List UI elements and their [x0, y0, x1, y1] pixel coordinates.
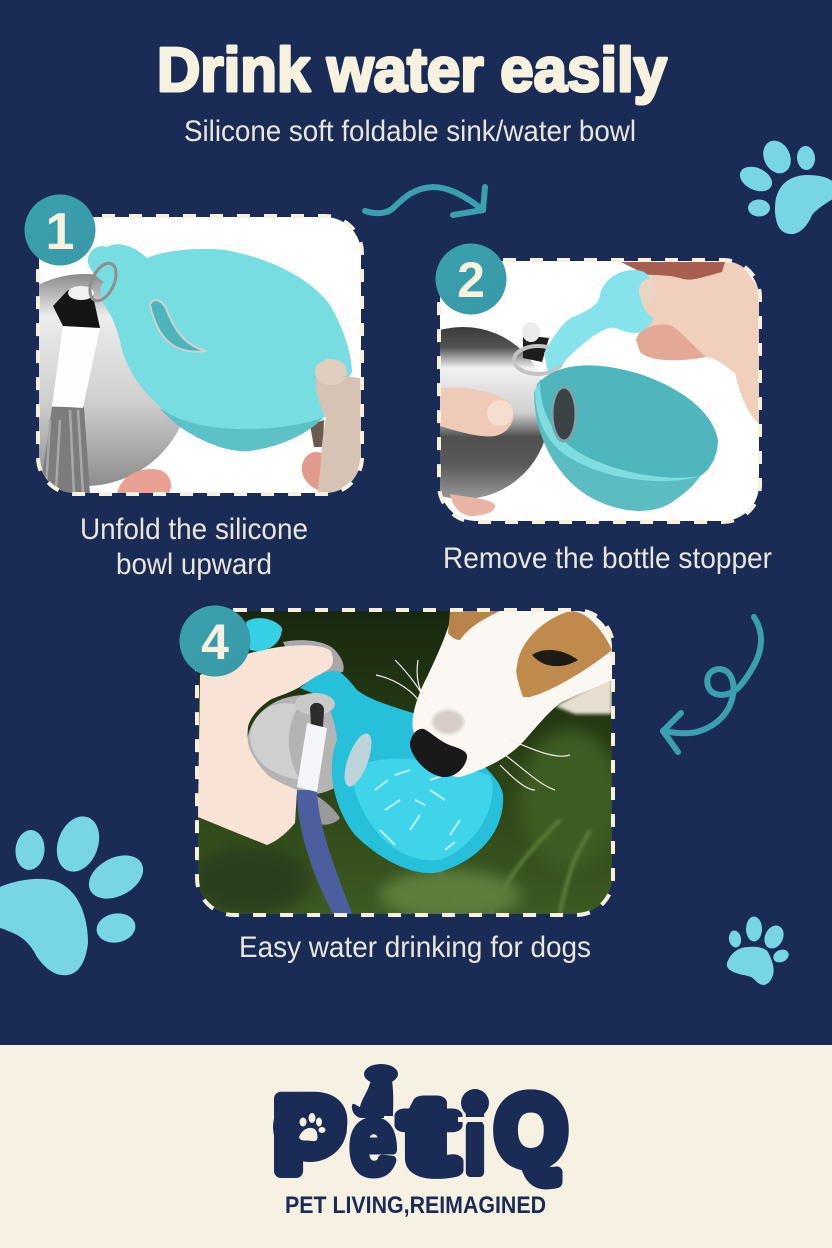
wordmark: i	[465, 1096, 485, 1191]
bottle neck through tab	[295, 693, 335, 715]
grass blades	[190, 730, 620, 920]
arrow: step 2 to step 4	[663, 617, 761, 752]
bowl knob	[246, 618, 282, 651]
fingers below	[117, 469, 171, 494]
bowl	[300, 671, 503, 873]
dashed border: step 4	[197, 610, 613, 915]
dog head	[412, 611, 612, 777]
icon: paw small right	[727, 916, 791, 985]
badge: step 1	[24, 194, 96, 266]
bowl tab	[544, 270, 654, 372]
whiskers	[376, 660, 570, 790]
footer band	[0, 1045, 832, 1248]
icon: paw in logo	[299, 1113, 326, 1141]
tagline: PET LIVING,REIMAGINED	[285, 1192, 546, 1219]
title: Drink water easily	[157, 36, 667, 105]
bottle top	[283, 640, 344, 676]
caption: step 1: Unfold the silicone	[80, 513, 308, 546]
right hand	[621, 262, 760, 425]
wordmark: P	[274, 1077, 344, 1194]
caption: step 2: Remove the bottle stopper	[443, 542, 772, 575]
dashed border: step 2	[439, 260, 760, 522]
bowl slot	[150, 300, 206, 352]
bowl interior	[537, 365, 718, 479]
steel bottle	[39, 274, 180, 486]
bowl outer	[534, 380, 704, 511]
badge: step 2: 2	[457, 252, 485, 308]
wordmark: Q	[495, 1075, 567, 1185]
bowl underside	[160, 408, 325, 451]
panel: step 2 photo	[440, 261, 759, 521]
wordmark	[274, 1075, 567, 1194]
logo	[273, 1064, 567, 1194]
icon: paw top right	[736, 136, 832, 234]
badge: step 2	[436, 244, 506, 314]
badge: step 1: 1	[46, 203, 74, 261]
leash	[297, 790, 352, 914]
strap	[43, 407, 90, 494]
i dot	[461, 1089, 489, 1117]
steel bottle	[440, 327, 544, 498]
dog nose	[410, 729, 467, 777]
steel bottle	[248, 695, 337, 794]
hand	[316, 376, 362, 494]
wordmark: t	[403, 1077, 455, 1194]
caption: step 4: Easy water drinking for dogs	[239, 931, 591, 964]
bottle cap	[523, 335, 549, 362]
ring	[88, 262, 118, 302]
thumb	[640, 276, 675, 318]
left hand	[440, 388, 514, 436]
bowl hole	[552, 387, 576, 441]
wordmark: e	[350, 1087, 396, 1194]
P bowl fill	[273, 1092, 347, 1162]
caption: step 1: bowl upward	[116, 548, 272, 581]
icon: paw large left	[0, 810, 151, 975]
dashed border: step 1	[38, 216, 362, 494]
i gap	[458, 1117, 492, 1122]
badge: step 4	[180, 606, 250, 676]
badge: step 4: 4	[201, 614, 229, 670]
beige background	[555, 675, 612, 714]
bowl top	[88, 244, 352, 429]
panel: step 1 photo	[39, 217, 361, 493]
panel: step 4 photo	[190, 611, 620, 920]
subtitle: Silicone soft foldable sink/water bowl	[184, 115, 636, 148]
arrow: step 1 to step 2	[365, 187, 485, 215]
hand	[198, 645, 333, 845]
icon: dog silhouette	[352, 1064, 398, 1118]
